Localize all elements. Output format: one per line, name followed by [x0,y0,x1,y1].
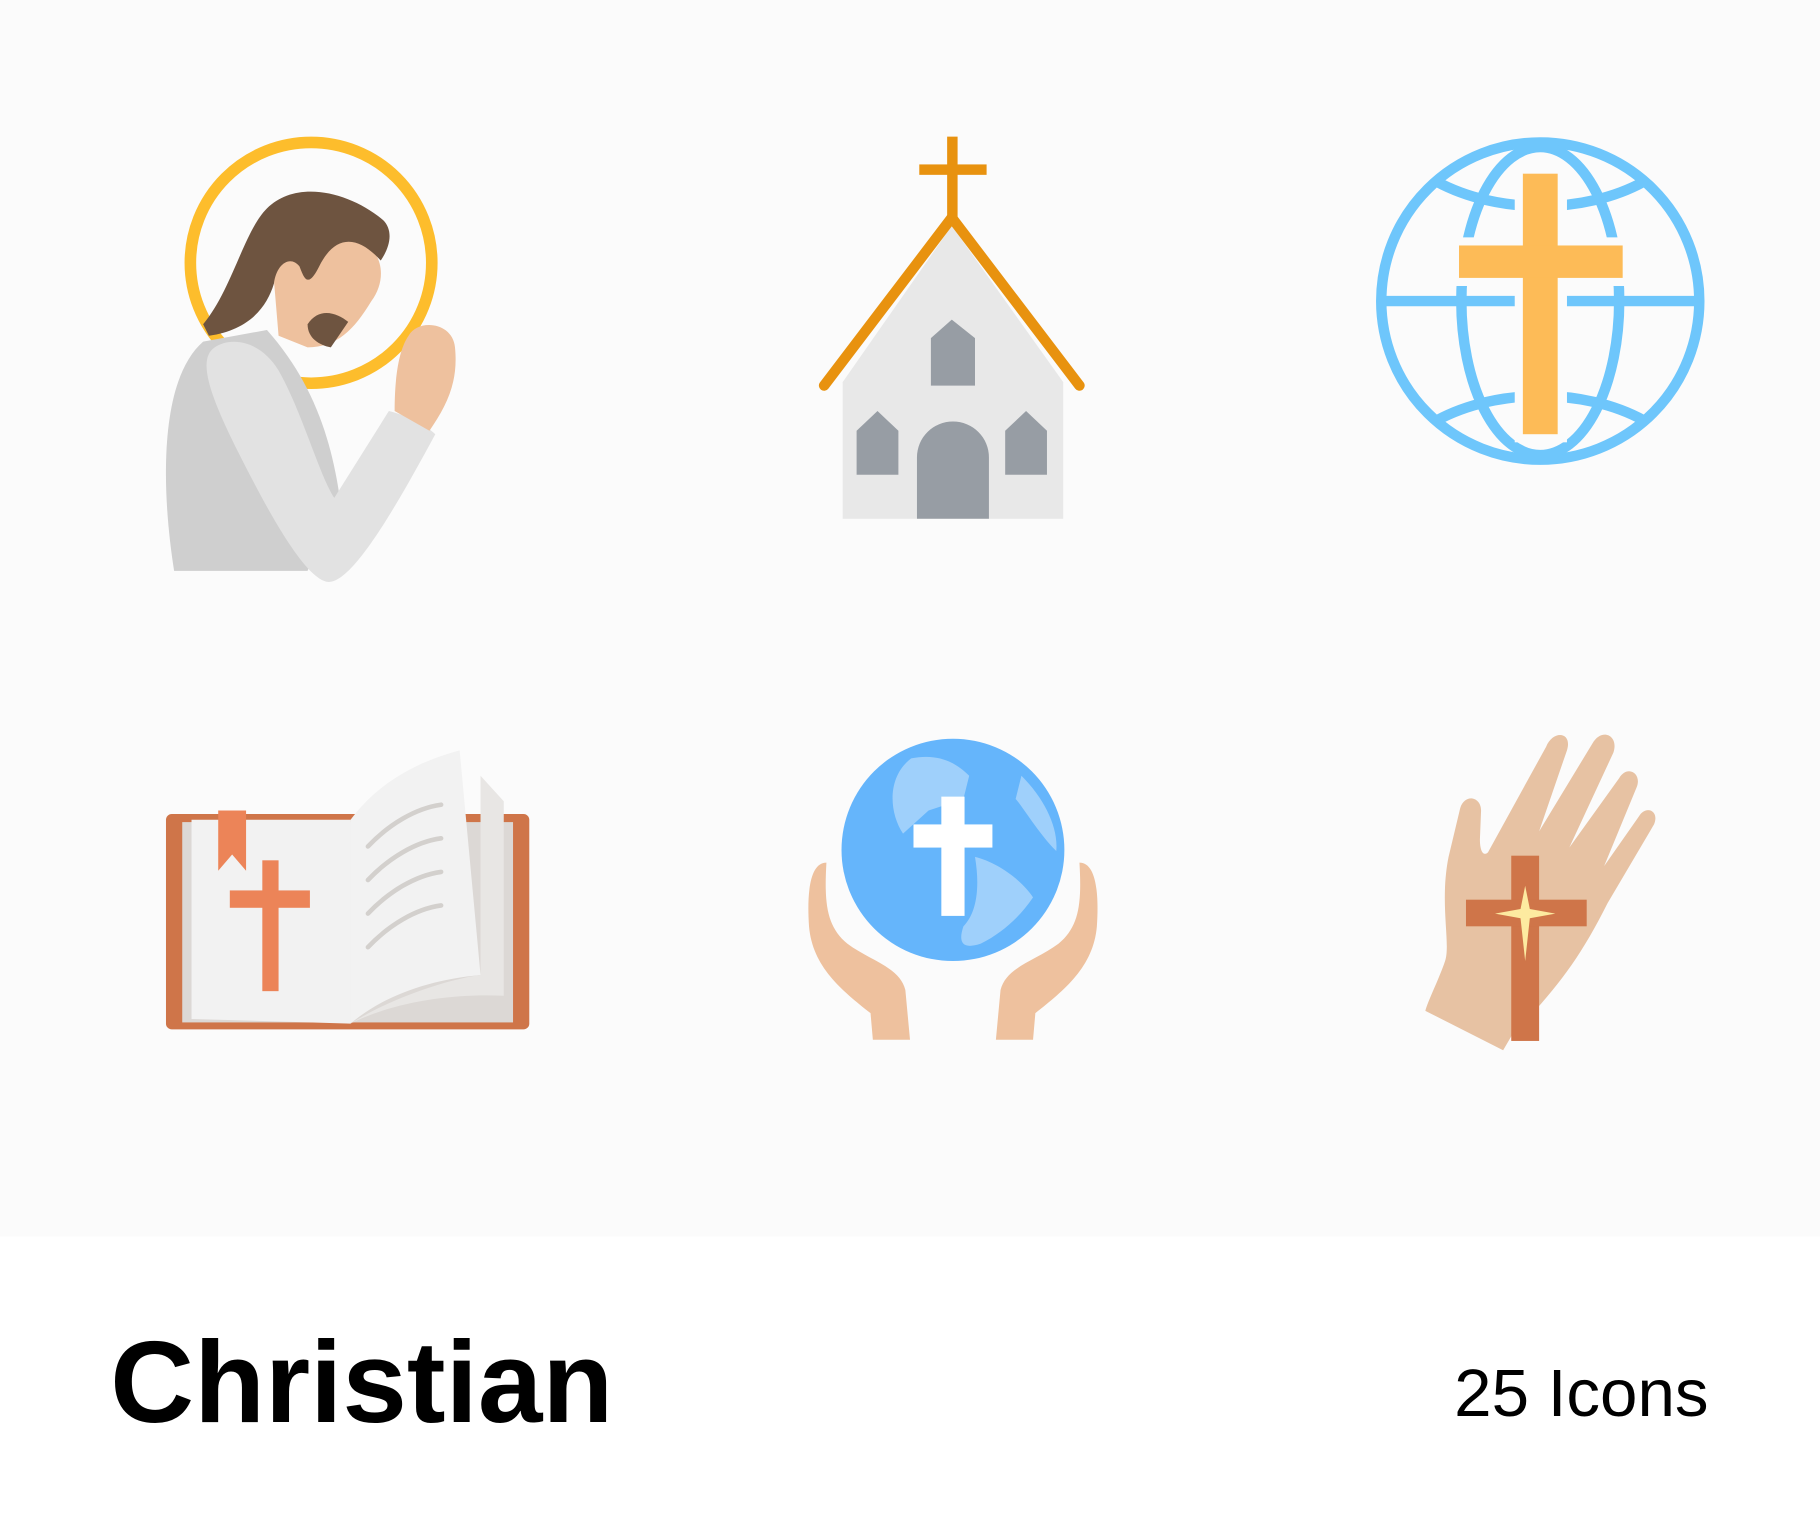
icon: open bible [166,750,529,1029]
icon: church [824,137,1079,519]
icon count: 25 Icons [1454,1356,1709,1431]
icon: globe with cross [1381,142,1699,460]
icon: praying Jesus [166,142,456,582]
icon: hands holding globe [808,739,1098,1040]
icon: hand with cross [1425,735,1655,1050]
footer background [0,1237,1820,1540]
title: Christian [110,1317,613,1447]
